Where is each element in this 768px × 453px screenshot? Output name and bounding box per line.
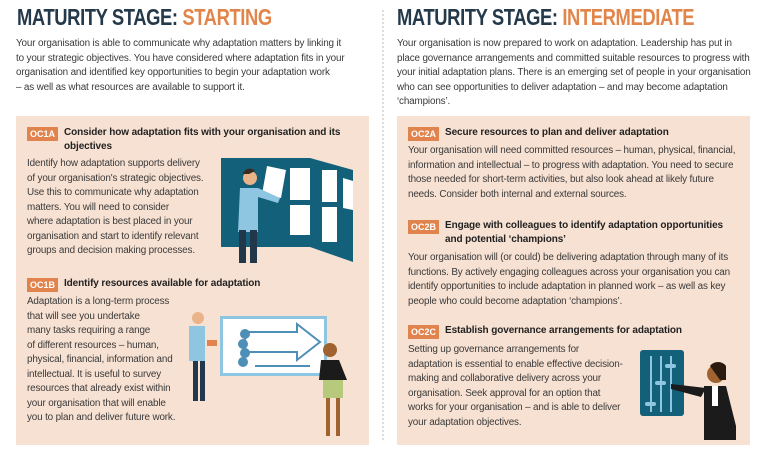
- intro: intermediate: who can see opportunities to deliver adaptation – and may become adaptation: [397, 82, 728, 92]
- intro: starting: organisation and identified key opportunities to begin your adaptation work: [16, 67, 330, 78]
- OC2B body: functions. By actively engaging colleagues across your organisation you can: [408, 266, 730, 278]
- OC2B body: [408, 252, 730, 306]
- illustration: man at pinboard: [221, 158, 353, 263]
- OC1B tag: [27, 278, 58, 292]
- OC1B body: intellectual. It is useful to survey: [27, 368, 161, 380]
- OC2B body: people who could become adaptation ‘champions’.: [408, 296, 622, 306]
- OC2B tag: [408, 220, 439, 234]
- OC1A tag: [27, 127, 58, 141]
- OC2A tag: [408, 127, 439, 141]
- panel: starting: [16, 116, 369, 445]
- OC1B body: many tasks requiring a range: [27, 325, 150, 336]
- OC1A heading: [64, 127, 340, 152]
- OC1B body: you to plan and deliver future work.: [27, 412, 175, 423]
- illustration: presentation with two people: [189, 312, 347, 436]
- OC1B heading: Identify resources available for adaptation: [64, 278, 260, 289]
- OC2C body: [408, 344, 623, 428]
- OC2B body: Your organisation will (or could) be delivering adaptation through many of its: [408, 252, 728, 263]
- OC2C body: making and collaborative delivery across your: [408, 373, 601, 384]
- OC1B body: Adaptation is a long-term process: [27, 296, 169, 307]
- OC1B body: [27, 296, 175, 423]
- OC2A tag: OC2A: [411, 129, 436, 139]
- OC2A body: [408, 145, 735, 200]
- OC2C body: your adaptation objectives.: [408, 416, 521, 428]
- OC2C tag: OC2C: [411, 327, 436, 337]
- OC1B body: resources that already exist within: [27, 383, 170, 394]
- OC2C tag: [408, 325, 439, 339]
- OC2B heading: [445, 220, 723, 245]
- OC2B body: identify opportunities to include adaptation in planned work – as well as key: [408, 281, 725, 292]
- intro: intermediate: place governance arrangements and committed suitable resources to progress with: [397, 52, 750, 64]
- OC1B body: of different resources – human,: [27, 340, 159, 350]
- OC1B body: that will see you undertake: [27, 310, 140, 322]
- title: intermediate: MATURITY STAGE: INTERMEDIATE: [397, 4, 694, 30]
- OC2B heading: Engage with colleagues to identify adaptation opportunities: [445, 220, 723, 231]
- OC1A body: Use this to communicate why adaptation: [27, 187, 199, 198]
- OC2C body: adaptation is essential to enable effective decision-: [408, 358, 623, 370]
- OC1A body: where adaptation is best placed in your: [27, 216, 192, 227]
- OC1A heading: Consider how adaptation fits with your organisation and its: [64, 127, 340, 138]
- OC2A body: Your organisation will need committed resources – human, physical, financial,: [408, 145, 735, 156]
- OC1B body: your organisation that will enable: [27, 398, 166, 408]
- title: starting: MATURITY STAGE: STARTING: [17, 4, 272, 30]
- OC1B body: physical, financial, information and: [27, 354, 173, 365]
- panel: intermediate: [397, 116, 750, 445]
- intro: intermediate: Your organisation is now prepared to work on adaptation. Leadership has put in: [397, 38, 732, 49]
- OC2A body: needs. Consider both internal and external sources.: [408, 188, 627, 200]
- divider: [382, 10, 386, 440]
- intro: intermediate: [397, 38, 751, 107]
- OC1B tag: OC1B: [30, 280, 55, 290]
- OC1A body: organisation and start to identify relevant: [27, 230, 198, 242]
- OC2B tag: OC2B: [411, 222, 436, 232]
- OC2C body: organisation. Seek approval for an option that: [408, 388, 600, 398]
- illustration: woman at control panel: [640, 350, 736, 440]
- intro: starting: to your strategic objectives. You have considered where adaptation fits in your: [16, 52, 344, 64]
- intro: intermediate: ‘champions’.: [397, 96, 450, 107]
- OC1A tag: OC1A: [30, 129, 55, 139]
- OC2A heading: Secure resources to plan and deliver adaptation: [445, 127, 669, 138]
- OC1A body: of your organisation's strategic objectives.: [27, 172, 203, 184]
- OC1A heading: objectives: [64, 141, 112, 152]
- OC2C heading: Establish governance arrangements for adaptation: [445, 325, 682, 336]
- OC2C body: works for your organisation – and is able to deliver: [408, 402, 620, 413]
- intro: intermediate: your initial adaptation plans. There is an emerging set of people in your organisation: [397, 67, 751, 78]
- intro: starting: Your organisation is able to communicate why adaptation matters by linking it: [16, 38, 341, 49]
- OC2C body: Setting up governance arrangements for: [408, 344, 579, 355]
- OC2A body: information and intellectual – to progress with adaptation. You need to secure: [408, 160, 733, 170]
- intro: starting: [16, 38, 344, 92]
- intro: starting: – as well as what resources are available to support it.: [16, 82, 245, 92]
- OC1A body: Identify how adaptation supports delivery: [27, 158, 200, 169]
- OC1A body: [27, 158, 203, 256]
- OC2A body: those needed for short-term activities, but also look ahead at likely future: [408, 174, 714, 185]
- OC2B heading: and potential ‘champions’: [445, 234, 566, 245]
- OC1A body: groups and decision making processes.: [27, 245, 195, 256]
- OC1A body: matters. You will need to consider: [27, 202, 169, 212]
